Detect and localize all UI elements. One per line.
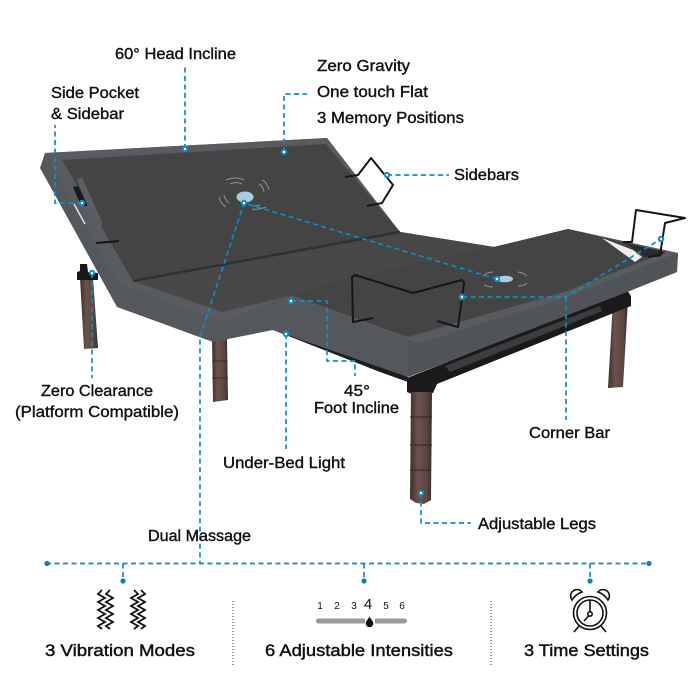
callout: side pocket: & Sidebar — [51, 106, 124, 123]
front left leg — [212, 338, 228, 402]
callout: zero clearance: Zero Clearance — [41, 383, 153, 400]
divider — [232, 601, 234, 666]
label: intensities: 6 Adjustable Intensities — [265, 641, 453, 660]
callout: positions — [282, 58, 464, 154]
massage motor head — [219, 178, 269, 209]
label: vibration modes: 3 Vibration Modes — [45, 641, 195, 660]
callout: sidebars: Sidebars — [454, 167, 519, 184]
callout: under-bed light — [223, 332, 346, 472]
label: time settings: 3 Time Settings — [524, 641, 649, 660]
massage feature connector — [44, 561, 652, 584]
icon: intensity slider — [316, 596, 407, 627]
metal base rail — [407, 290, 631, 394]
icon: intensity slider: 1 — [317, 601, 323, 612]
frame top lip — [45, 138, 678, 343]
foot sidebar — [602, 210, 685, 262]
bed illustration — [40, 138, 685, 504]
icon: intensity slider: 4 — [364, 596, 372, 613]
callout: head incline: 60° Head Incline — [115, 46, 236, 63]
callout: positions: 3 Memory Positions — [317, 110, 464, 127]
head sidebar — [345, 158, 393, 206]
front right leg — [410, 392, 432, 504]
callout: adjustable legs: Adjustable Legs — [478, 516, 596, 533]
callout: dual massage: Dual Massage — [148, 528, 251, 545]
callout: sidebars — [385, 167, 519, 184]
massage motor foot — [483, 272, 527, 287]
callout: adjustable legs — [419, 491, 596, 533]
under-frame shadow — [273, 330, 408, 382]
front sidebar — [352, 275, 464, 327]
callout: foot incline — [289, 299, 399, 417]
foot section shading — [133, 232, 494, 312]
callout: foot incline: Foot Incline — [314, 400, 399, 417]
callout: foot incline: 45° — [344, 383, 370, 400]
divider — [490, 601, 492, 666]
icon: vibration waves — [98, 590, 145, 629]
callout: side pocket — [51, 85, 140, 205]
callout: positions: One touch Flat — [317, 84, 429, 101]
icon: intensity slider: 2 — [334, 601, 340, 612]
callout: zero clearance — [15, 271, 179, 421]
callout: corner bar — [460, 237, 663, 442]
mattress surface — [62, 144, 666, 337]
callout: corner bar: Corner Bar — [529, 425, 610, 442]
callout: side pocket: Side Pocket — [51, 85, 140, 102]
callout: head incline — [115, 46, 236, 151]
callout: dual massage — [148, 201, 499, 563]
icon: alarm clock — [571, 590, 609, 632]
side pocket — [73, 177, 119, 243]
left rear leg — [77, 264, 98, 349]
callout: zero clearance: (Platform Compatible) — [15, 404, 179, 421]
icon: intensity slider: 3 — [351, 601, 357, 612]
callout: under-bed light: Under-Bed Light — [223, 455, 346, 472]
icon: intensity slider: 5 — [383, 601, 389, 612]
callout: positions: Zero Gravity — [317, 58, 410, 75]
icon: intensity slider: 6 — [399, 601, 405, 612]
right rear leg — [608, 300, 628, 388]
fold line — [133, 232, 400, 281]
frame side — [40, 138, 678, 377]
